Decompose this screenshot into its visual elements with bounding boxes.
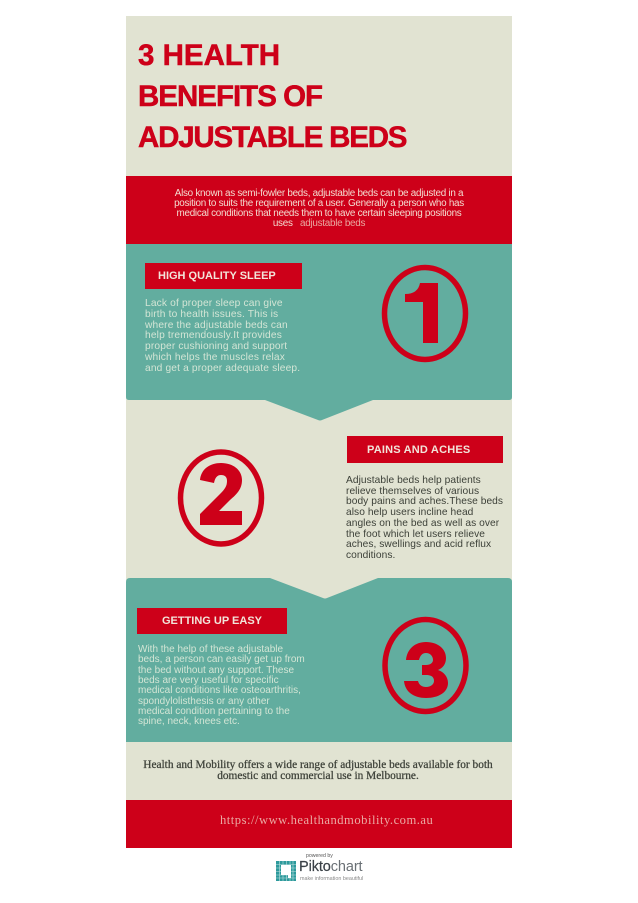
footer url banner [126,800,512,848]
body text [346,475,503,561]
panel: high quality sleep [126,244,512,420]
wordmark: Piktochart [299,859,362,875]
body text: Adjustable beds help patients [346,475,481,486]
intro banner [126,176,512,244]
teal panel shape [126,578,512,742]
body text: where the adjustable beds can [145,320,288,331]
body text: With the help of these adjustable [138,644,283,655]
title: 3 HEALTH [138,39,280,72]
body text: body pains and aches.These beds [346,496,503,507]
body text: angles on the bed as well as over [346,518,499,529]
body text: aches, swellings and acid reflux [346,539,491,550]
heading: HIGH QUALITY SLEEP [158,270,276,282]
body text: which helps the muscles relax [145,352,285,363]
body text: conditions. [346,550,395,561]
body text: medical conditions like osteoarthritis, [138,685,301,696]
body text: and get a proper adequate sleep. [145,363,300,374]
number 3 icon [382,616,469,714]
body text: spine, neck, knees etc. [138,716,240,727]
closing statement [143,759,493,782]
title: BENEFITS OF [138,80,322,113]
number 1 icon [382,264,468,362]
body text: spondylolisthesis or any other [138,696,270,706]
logo mark [276,861,296,881]
heading: GETTING UP EASY [162,615,262,627]
piktochart logo [276,853,363,882]
body text [145,298,300,374]
body text: help tremendously.It provides [145,330,282,341]
title: ADJUSTABLE BEDS [138,120,406,154]
intro banner: Also known as semi-fowler beds, adjustable beds can be adjusted in a [175,188,463,198]
heading [347,436,503,463]
background panel [126,16,512,848]
body text: medical condition pertaining to the [138,706,290,717]
heading: PAINS AND ACHES [367,444,470,456]
body text: the foot which let users relieve [346,528,485,540]
closing statement: domestic and commercial use in Melbourne. [217,770,419,782]
intro banner: position to suits the requirement of a user. Generally a person who has [174,198,464,208]
title [138,39,406,154]
body text: Lack of proper sleep can give [145,298,283,309]
panel: pains and aches [178,436,503,561]
number 2 icon [178,449,264,547]
body text: the bed without any support. These [138,665,294,676]
powered by: powered by [306,853,333,859]
body text: proper cushioning and support [145,341,287,352]
tagline: make information beautiful [300,876,363,882]
intro banner: medical conditions that needs them to have certain sleeping positions [177,208,461,218]
heading [137,608,287,634]
heading [145,263,302,289]
body text: birth to health issues. This is [145,309,278,320]
body text: beds are very useful for specific [138,675,279,686]
body text: relieve themselves of various [346,486,479,497]
body text: beds, a person can easily get up from [138,654,305,665]
body text: also help users incline head [346,507,473,518]
body text [138,644,305,727]
intro banner: uses adjustable beds [273,218,365,228]
footer url banner: https://www.healthandmobility.com.au [220,813,433,827]
panel: getting up easy [126,578,512,742]
closing statement: Health and Mobility offers a wide range of adjustable beds available for both [143,759,493,771]
teal panel shape [126,244,512,420]
